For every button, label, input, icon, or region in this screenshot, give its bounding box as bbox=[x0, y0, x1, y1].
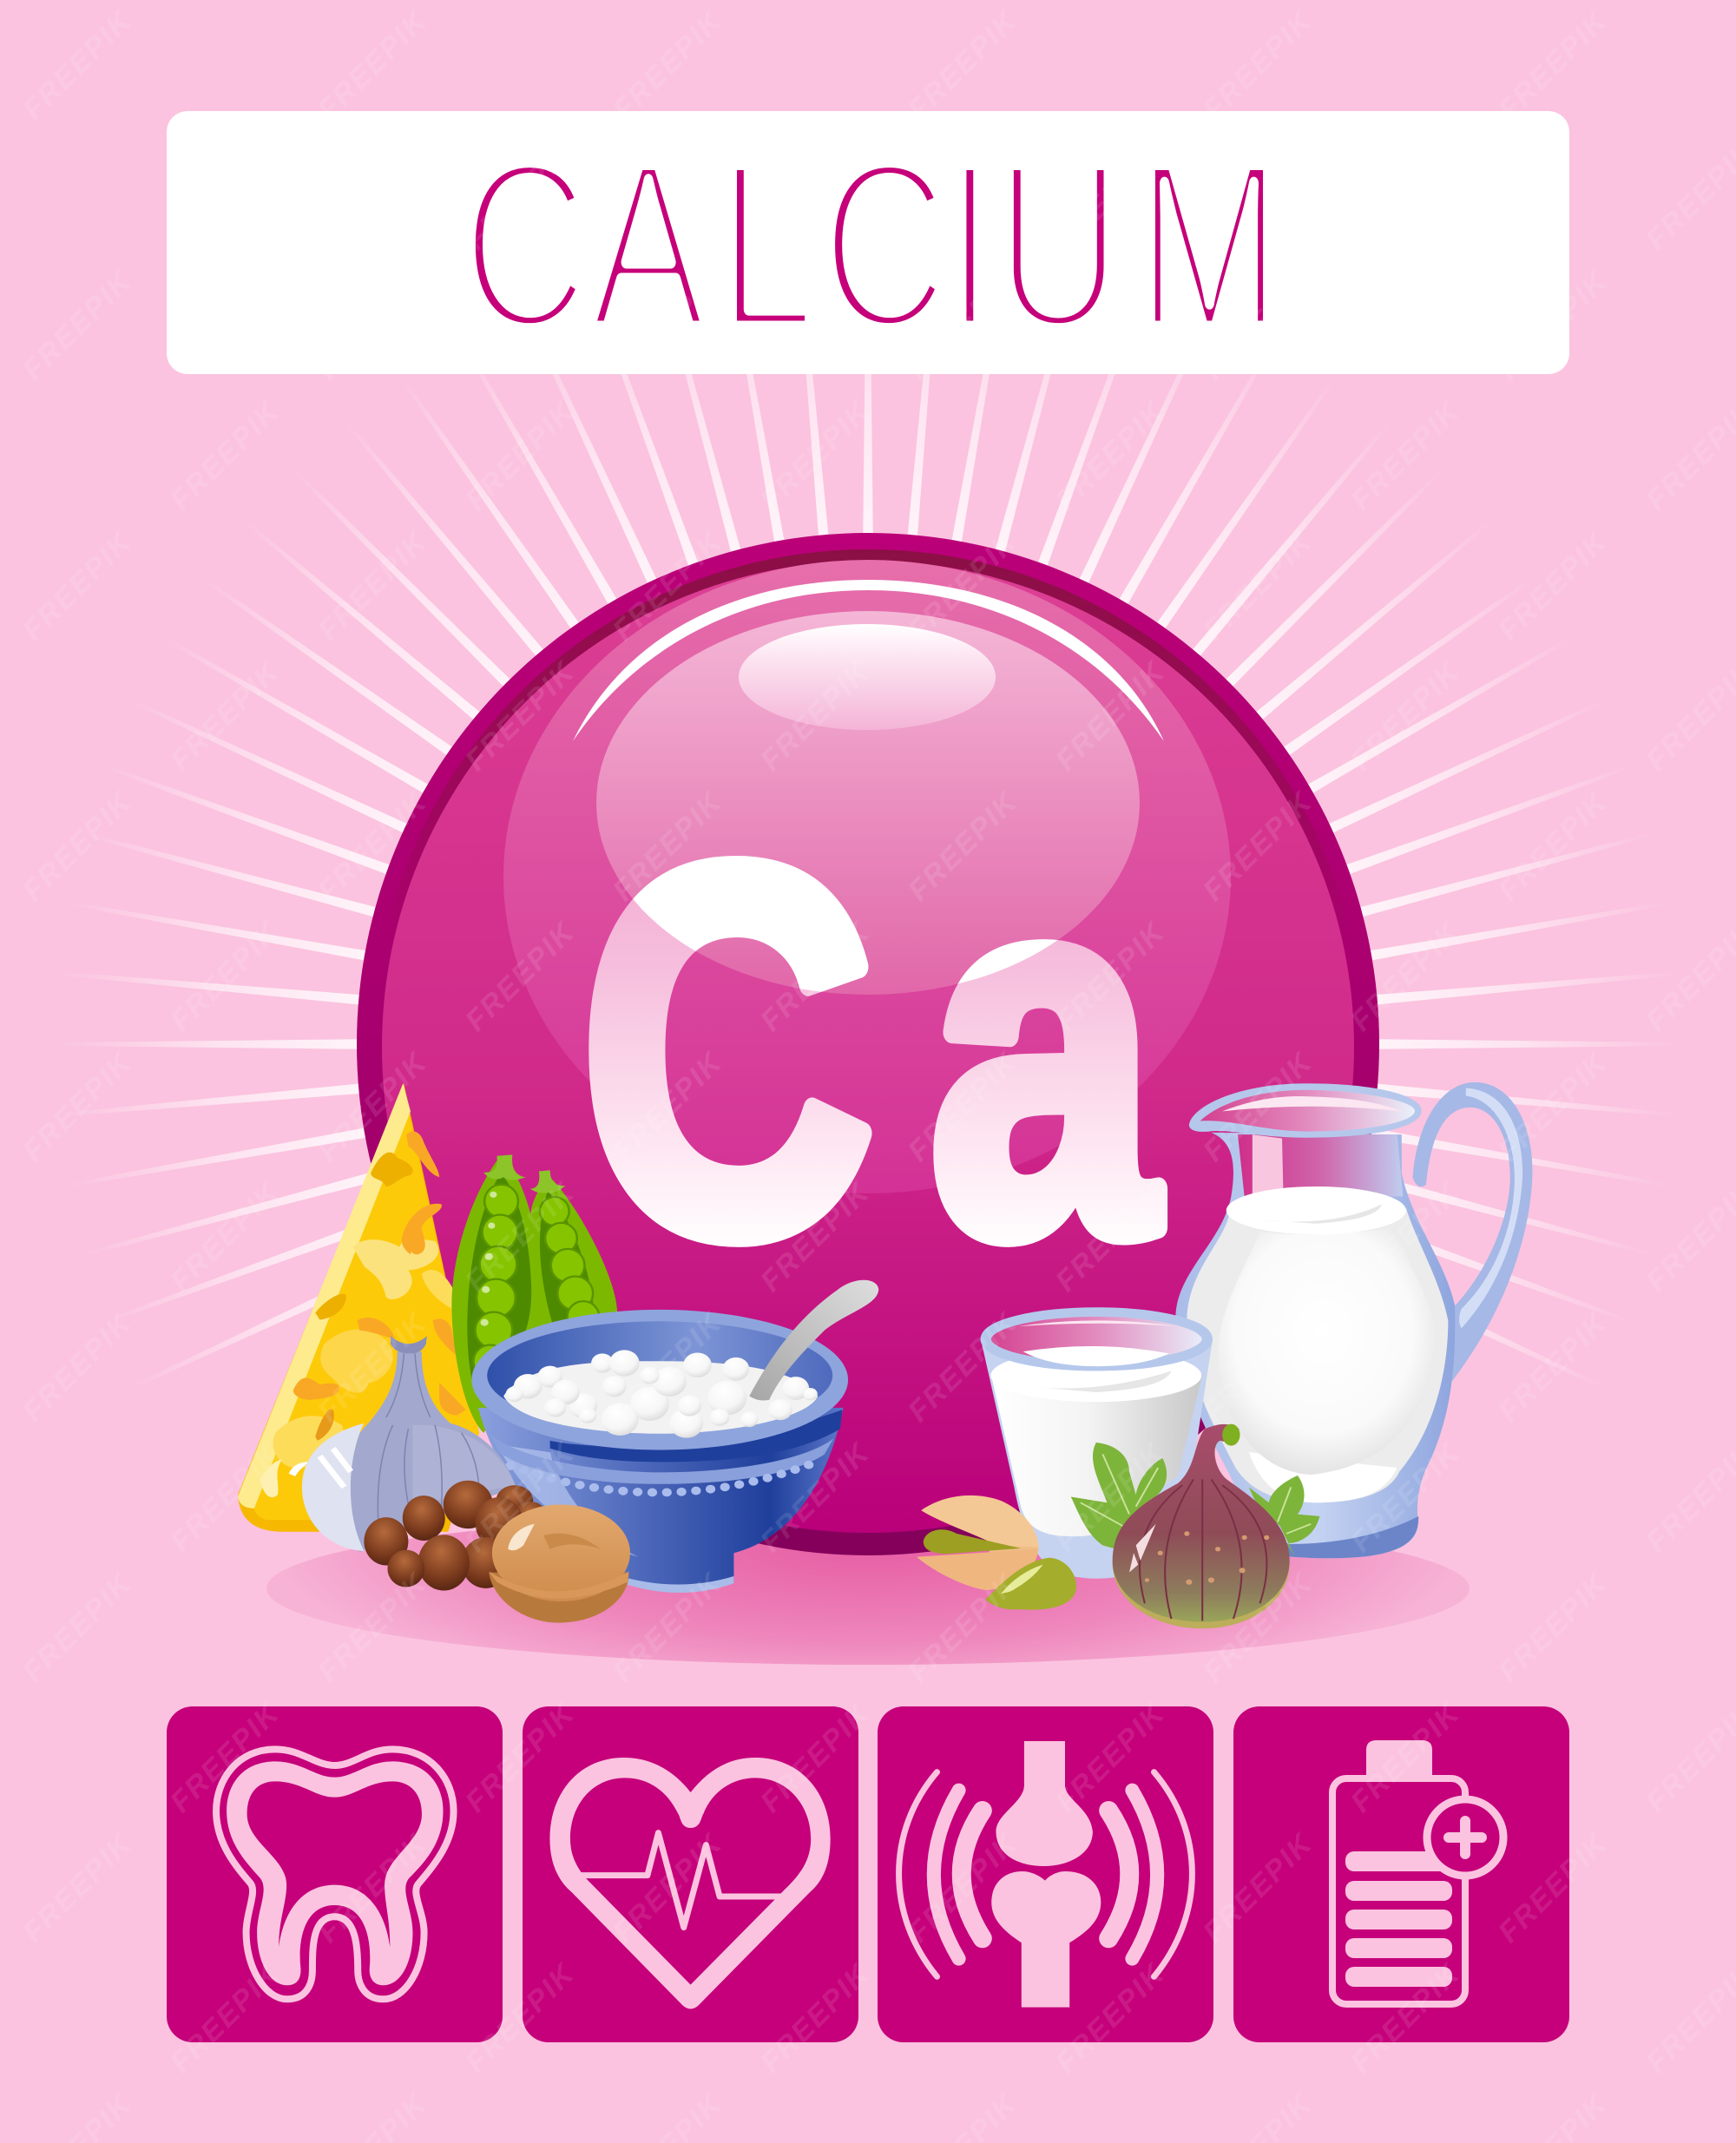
icon: tooth bbox=[216, 1749, 454, 1999]
icon: bone joint bbox=[899, 1741, 1192, 2008]
fig leaves bbox=[1071, 1443, 1319, 1557]
jug of milk bbox=[1176, 1082, 1532, 1558]
pea pods bbox=[451, 1154, 617, 1433]
icon panel: heart bbox=[523, 1706, 858, 2042]
sun rays behind the sphere bbox=[56, 233, 1680, 1392]
allspice berries bbox=[364, 1481, 547, 1591]
spoon bbox=[749, 1280, 878, 1400]
icon panel: joint bbox=[878, 1706, 1213, 2042]
element symbol: Ca: Ca bbox=[581, 760, 1159, 1342]
element symbol: Ca: Ca bbox=[581, 760, 1159, 1342]
glass of milk bbox=[981, 1312, 1213, 1579]
garlic bulb bbox=[302, 1336, 516, 1552]
title: CALCIUM: CALCIUM bbox=[462, 113, 1282, 378]
food group right bbox=[917, 1082, 1532, 1628]
icon panel: teeth bbox=[167, 1706, 503, 2042]
pistachios bbox=[917, 1495, 1076, 1610]
title panel bbox=[167, 111, 1569, 378]
mineral sphere bbox=[357, 533, 1379, 1555]
food group left bbox=[238, 1083, 878, 1623]
ground shadow bbox=[266, 1512, 1470, 1665]
walnut bbox=[489, 1504, 630, 1623]
icon: heart with pulse bbox=[549, 1758, 831, 2008]
icon: battery with plus bbox=[1332, 1740, 1503, 2004]
fig bbox=[1113, 1424, 1290, 1628]
cheese wedge bbox=[238, 1083, 479, 1532]
icon panel: energy bbox=[1233, 1706, 1569, 2042]
bowl of cottage cheese bbox=[471, 1280, 878, 1593]
element symbol: Ca bbox=[589, 856, 1168, 1247]
